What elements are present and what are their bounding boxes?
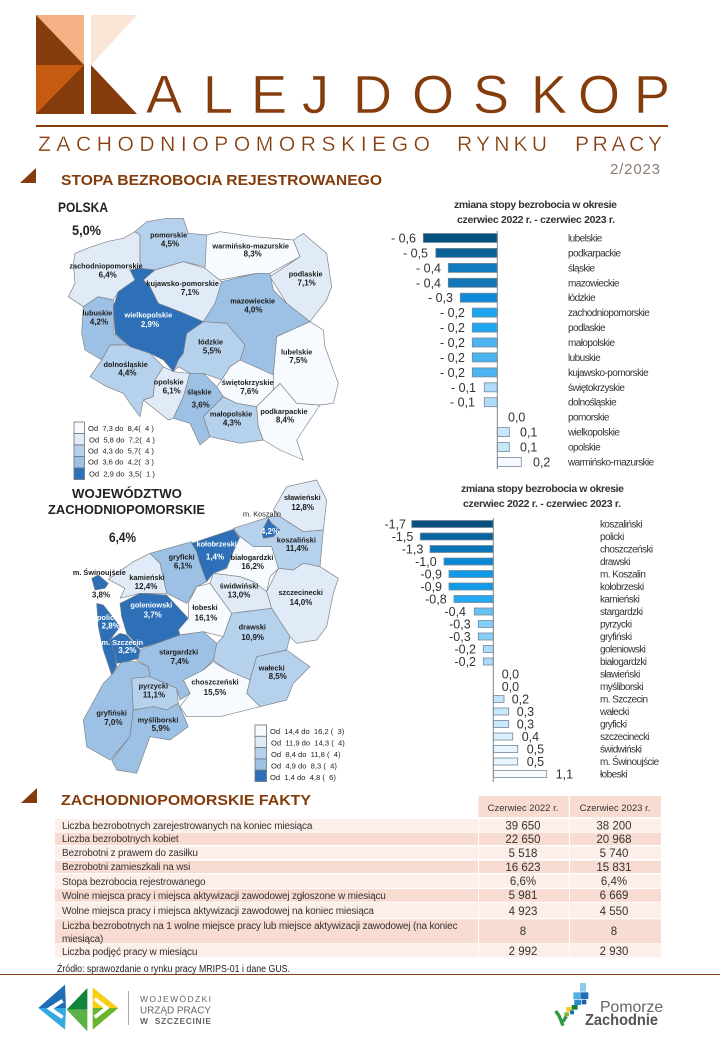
section heading: facts: [21, 788, 311, 809]
labels: łobeski: [600, 770, 627, 780]
labels: m. Koszalin: [600, 570, 645, 580]
labels: m. Szczecin: [600, 694, 648, 706]
axis: [492, 518, 494, 782]
values: -1,5: [392, 530, 413, 544]
table values 2023: 5 740: [600, 848, 628, 860]
legend: Poland: Od 5,8 do 7,2( 4 ): [89, 436, 155, 444]
labels: wielkopolskie: [567, 428, 620, 439]
section heading: facts: ZACHODNIOPOMORSKIE FAKTY: [61, 792, 311, 809]
values: -1,3: [402, 542, 423, 556]
map: Zachodniopomorskie: kamieński: [129, 573, 165, 582]
labels: myśliborski: [600, 682, 643, 693]
table row labels: Bezrobotni z prawem do zasiłku: [62, 848, 198, 859]
map: Poland: 4,2%: [90, 317, 108, 326]
table values 2022: 2 992: [509, 946, 537, 958]
chart title: [461, 483, 624, 510]
labels: łódzkie: [568, 293, 596, 304]
map: Zachodniopomorskie: myśliborski: [138, 715, 178, 724]
values: [391, 232, 550, 469]
labels: pyrzycki: [600, 620, 632, 630]
values: -1,0: [415, 555, 437, 569]
map: Zachodniopomorskie: świdwiński: [220, 581, 258, 590]
table: facts: [55, 796, 661, 958]
values: -0,9: [420, 580, 442, 594]
map: Poland: 7,5%: [289, 356, 307, 365]
values: 0,0: [502, 668, 519, 682]
logo: Pomorze Zachodnie: [556, 983, 663, 1029]
table values 2022: 8: [520, 926, 526, 938]
values: 0,5: [527, 742, 544, 756]
map: Zachodniopomorskie: 15,5%: [204, 688, 226, 697]
chart: change Zachodniopomorskie: [384, 483, 660, 782]
values: 0,0: [502, 680, 519, 694]
map: Zachodniopomorskie: m. Szczecin: [102, 638, 144, 647]
bars: [423, 234, 521, 466]
map: Zachodniopomorskie: sławieński: [284, 493, 321, 502]
table row labels: Stopa bezrobocia rejestrowanego: [62, 877, 206, 888]
axis: [496, 231, 498, 469]
map: Zachodniopomorskie: 8,5%: [269, 672, 287, 681]
labels: [599, 520, 660, 780]
subtitle: RYNKU: [457, 133, 547, 156]
heading: voivodeship: WOJEWÓDZTWO: [72, 486, 182, 501]
legend: Poland: Od 4,3 do 5,7( 4 ): [88, 446, 154, 456]
map: Poland: 8,3%: [244, 250, 262, 259]
table values 2023: 6 669: [600, 890, 628, 902]
map: Zachodniopomorskie: łobeski: [192, 603, 218, 612]
map: Poland: podlaskie: [289, 270, 323, 279]
map: Poland: 7,1%: [298, 279, 316, 288]
map: Zachodniopomorskie: wałecki: [258, 663, 285, 672]
legend: Zachodniopomorskie: Od 11,9 do 14,3 ( 4): [271, 738, 345, 748]
values: 0,3: [517, 705, 534, 719]
map: Zachodniopomorskie: 12,4%: [135, 582, 157, 591]
map: Zachodniopomorskie: 11,1%: [143, 691, 165, 700]
source note: Źródło: sprawozdanie o rynku pracy MRIPS-01 i dane GUS.: [57, 962, 290, 975]
bars: [412, 520, 547, 778]
map: Zachodniopomorskie: 10,9%: [241, 633, 264, 642]
wordmark: W SZCZECINIE: [140, 1016, 211, 1026]
values: 0,0: [508, 411, 525, 425]
map: Poland: lubelskie: [281, 347, 312, 356]
table values 2023: 20 968: [596, 834, 632, 846]
logo: kaleidoscope K: [36, 15, 137, 114]
labels: kołobrzeski: [600, 582, 644, 593]
wordmark: [140, 994, 211, 1026]
separator: [128, 991, 129, 1025]
labels: opolskie: [568, 442, 601, 454]
values: - 0,2: [440, 321, 465, 335]
table values 2022: 4 923: [509, 906, 537, 918]
labels: mazowieckie: [568, 278, 620, 289]
labels: szczecinecki: [600, 732, 650, 743]
labels: policki: [600, 532, 624, 543]
map: Poland: śląskie: [187, 388, 212, 397]
values: - 0,1: [451, 381, 476, 395]
labels: gryficki: [600, 720, 627, 730]
map: Poland: opolskie: [154, 377, 184, 386]
labels: świdwiński: [600, 744, 642, 756]
map: Poland: małopolskie: [210, 410, 252, 419]
table values 2023: 6,4%: [601, 876, 627, 888]
values: - 0,2: [440, 351, 465, 365]
map: Poland: 8,4%: [276, 416, 294, 425]
regional rate: 6,4%: [109, 530, 136, 545]
legend: Poland: Od 3,6 do 4,2( 3 ): [88, 458, 154, 466]
values: 0,3: [517, 718, 534, 732]
legend: Zachodniopomorskie: [255, 725, 345, 782]
table header: [478, 796, 661, 817]
values: 0,5: [527, 755, 544, 769]
table values 2022: 5 981: [509, 890, 537, 902]
chart title: zmiana stopy bezrobocia w okresie: [454, 199, 617, 211]
values: - 0,6: [391, 232, 416, 246]
title rule: [36, 125, 668, 127]
table row labels: Liczba bezrobotnych zarejestrowanych na koniec miesiąca: [62, 821, 313, 832]
table row labels: Bezrobotni zamieszkali na wsi: [62, 862, 190, 873]
values: - 0,4: [416, 261, 441, 275]
map: Zachodniopomorskie: 2,8%: [102, 622, 120, 631]
labels: m. Świnoujście: [600, 755, 660, 768]
map: Poland: zachodniopomorskie: [69, 262, 143, 271]
labels: kujawsko-pomorskie: [568, 368, 649, 379]
icon: pixel squares: [556, 983, 588, 1026]
map: Poland: warmińsko-mazurskie: [211, 241, 289, 250]
map: Zachodniopomorskie: m. Świnoujście: [73, 568, 126, 577]
values: - 0,2: [440, 366, 465, 380]
map: Zachodniopomorskie: 3,8%: [92, 591, 110, 600]
values: -0,3: [449, 618, 471, 632]
values: -0,8: [425, 592, 447, 606]
icon: three diamonds: [38, 985, 118, 1031]
map: Poland: łódzkie: [198, 337, 223, 346]
map: Zachodniopomorskie: 3,7%: [144, 610, 162, 619]
map: Poland: 6,4%: [99, 270, 117, 279]
chart title: zmiana stopy bezrobocia w okresie: [461, 483, 624, 495]
legend: Zachodniopomorskie: Od 14,4 do 16,2 ( 3): [270, 727, 345, 736]
chart: change Poland: [391, 199, 655, 469]
logo: Pomorze Zachodnie: Pomorze: [600, 999, 663, 1016]
map: Poland: 4,0%: [244, 306, 262, 315]
map: Poland: 4,3%: [223, 419, 241, 428]
map: Zachodniopomorskie: 6,1%: [174, 561, 192, 570]
map: Zachodniopomorskie: kołobrzeski: [197, 540, 237, 549]
labels: drawski: [600, 557, 630, 568]
section heading: unemployment rate: STOPA BEZROBOCIA REJESTROWANEGO: [61, 173, 382, 189]
map: Poland: 6,1%: [163, 386, 181, 395]
values: 0,1: [520, 426, 537, 440]
map: Zachodniopomorskie: stargardzki: [159, 647, 198, 656]
labels: podlaskie: [568, 323, 606, 334]
table values 2022: 39 650: [505, 820, 541, 832]
values: - 0,4: [416, 276, 441, 290]
values: - 0,1: [450, 396, 475, 410]
legend: Poland: Od 7,3 do 8,4( 4 ): [88, 424, 154, 433]
table values 2022: [505, 820, 541, 958]
table header: Czerwiec 2022 r.: [488, 803, 558, 814]
national rate: 5,0%: [72, 223, 101, 238]
labels: świętokrzyskie: [568, 383, 625, 394]
map: Zachodniopomorskie: 16,2%: [241, 562, 264, 571]
values: - 0,5: [403, 246, 428, 260]
values: - 0,2: [440, 336, 465, 350]
heading: Polska: POLSKA: [58, 199, 108, 215]
subtitle: PRACY: [575, 133, 662, 156]
map: Zachodniopomorskie: 16,1%: [195, 614, 217, 623]
table values 2023: 4 550: [600, 906, 628, 918]
table values 2022: 22 650: [505, 834, 541, 846]
table values 2022: 5 518: [509, 848, 537, 860]
wordmark: WOJEWÓDZKI: [140, 994, 211, 1004]
subtitle: [38, 133, 662, 156]
table values 2023: 38 200: [596, 820, 632, 832]
values: - 0,3: [428, 291, 453, 305]
values: 0,4: [522, 730, 539, 744]
legend: Zachodniopomorskie: Od 1,4 do 4,8 ( 6): [270, 773, 336, 782]
values: -0,9: [420, 568, 442, 582]
map: Poland: świętokrzyskie: [222, 378, 274, 387]
chart title: czerwiec 2022 r. - czerwiec 2023 r.: [457, 214, 615, 226]
table row labels: Wolne miejsca pracy i miejsca aktywizacji zawodowej zgłoszone w miesiącu: [62, 891, 386, 902]
map: Zachodniopomorskie: goleniowski: [130, 601, 172, 610]
values: [384, 518, 573, 782]
map: Zachodniopomorskie: 4,2%: [261, 527, 279, 536]
map: Poland: 5,5%: [203, 346, 221, 355]
chart title: czerwiec 2022 r. - czerwiec 2023 r.: [463, 498, 621, 510]
map: Zachodniopomorskie: choszczeński: [191, 678, 239, 687]
table header: Czerwiec 2023 r.: [580, 803, 650, 814]
labels: dolnośląskie: [568, 398, 617, 409]
map: Zachodniopomorskie: pyrzycki: [139, 681, 168, 690]
map: Poland: 2,9%: [141, 320, 159, 329]
table values 2023: 2 930: [600, 946, 628, 958]
chart title: [454, 199, 617, 226]
labels: choszczeński: [600, 544, 653, 556]
table row labels: [62, 821, 457, 958]
wordmark: URZĄD PRACY: [140, 1004, 211, 1016]
heading: voivodeship: ZACHODNIOPOMORSKIE: [48, 502, 205, 517]
labels: lubelskie: [568, 234, 603, 244]
map: Zachodniopomorskie: szczecinecki: [278, 588, 323, 597]
map: Poland: 4,4%: [118, 368, 136, 377]
labels: śląskie: [568, 263, 596, 274]
table values 2022: 16 623: [505, 862, 541, 874]
labels: [567, 234, 655, 468]
labels: goleniowski: [600, 644, 646, 656]
map: Poland: kujawsko-pomorskie: [146, 279, 219, 288]
logo: Pomorze Zachodnie: Zachodnie: [585, 1012, 658, 1029]
values: -0,4: [444, 605, 466, 619]
labels: koszaliński: [600, 520, 642, 530]
values: -1,7: [384, 518, 406, 532]
map: Poland: 7,1%: [181, 288, 199, 297]
map: Zachodniopomorskie: 12,8%: [291, 503, 314, 512]
map: Poland: pomorskie: [150, 230, 187, 239]
legend: Zachodniopomorskie: Od 4,9 do 8,3 ( 4): [271, 762, 337, 770]
labels: warmińsko-mazurskie: [567, 457, 655, 468]
map: Zachodniopomorskie: 11,4%: [286, 544, 308, 553]
map: Zachodniopomorskie: gryficki: [169, 552, 195, 561]
map: Zachodniopomorskie: koszaliński: [277, 535, 316, 544]
values: 1,1: [556, 768, 573, 782]
values: 0,2: [512, 692, 529, 706]
map: Zachodniopomorskie: [73, 480, 338, 773]
labels: białogardzki: [600, 657, 647, 668]
labels: pomorskie: [568, 413, 610, 424]
map: Zachodniopomorskie: policki: [97, 613, 120, 622]
map: Zachodniopomorskie: drawski: [239, 623, 266, 632]
values: 0,2: [533, 455, 550, 469]
footer rule: [0, 974, 720, 975]
heading: voivodeship: [48, 486, 205, 517]
title: ALEJDOSKOP: [146, 65, 670, 125]
legend: Poland: Od 2,9 do 3,5( 1 ): [89, 470, 155, 478]
map: Zachodniopomorskie: 3,2%: [118, 646, 136, 655]
map: Zachodniopomorskie: 1,4%: [206, 552, 224, 561]
logo: Wojewódzki Urząd Pracy: [38, 985, 211, 1031]
map: Poland: 3,6%: [192, 401, 210, 410]
map: Zachodniopomorskie: 7,4%: [171, 657, 189, 666]
labels: gryfiński: [600, 632, 632, 643]
values: -0,3: [449, 630, 471, 644]
labels: stargardzki: [600, 607, 643, 618]
subtitle: ZACHODNIOPOMORSKIEGO: [38, 133, 430, 156]
map: Zachodniopomorskie: m. Koszalin: [243, 510, 281, 519]
values: -0,2: [454, 655, 476, 669]
issue number: 2/2023: [610, 161, 660, 178]
map: Poland: 4,5%: [161, 240, 179, 249]
labels: podkarpackie: [568, 248, 622, 259]
map: Zachodniopomorskie: 13,0%: [228, 590, 250, 599]
table values 2023: 8: [611, 926, 617, 938]
map: Poland: mazowieckie: [230, 296, 275, 305]
map: Poland: lubuskie: [82, 309, 112, 318]
labels: kamieński: [600, 594, 640, 606]
table values 2023: 15 831: [596, 862, 632, 874]
table row labels: Wolne miejsca pracy i miejsca aktywizacji zawodowej na koniec miesiąca: [62, 906, 374, 917]
map: Zachodniopomorskie: 7,0%: [104, 718, 122, 727]
legend: Poland: [74, 422, 155, 480]
table values 2023: [596, 820, 632, 958]
values: - 0,2: [440, 306, 465, 320]
values: 0,1: [520, 440, 537, 454]
table row labels: Liczba podjęć pracy w miesiącu: [62, 947, 197, 958]
section heading: unemployment rate: [20, 168, 382, 189]
table row backgrounds: [55, 819, 661, 957]
labels: małopolskie: [568, 338, 615, 349]
map: Zachodniopomorskie: 14,0%: [290, 598, 312, 607]
labels: zachodniopomorskie: [568, 308, 650, 319]
map: Poland: podkarpackie: [260, 407, 308, 416]
map: Zachodniopomorskie: gryfiński: [96, 709, 127, 718]
values: -0,2: [454, 642, 476, 656]
table values 2022: 6,6%: [510, 876, 536, 888]
legend: Zachodniopomorskie: Od 8,4 do 11,8 ( 4): [271, 750, 341, 759]
map: Poland: 7,6%: [240, 387, 258, 396]
map: Poland: dolnośląskie: [103, 360, 148, 369]
map: Poland: [68, 218, 338, 460]
labels: sławieński: [600, 670, 640, 680]
map: Poland: wielkopolskie: [124, 310, 172, 319]
map: Zachodniopomorskie: białogardzki: [231, 553, 273, 562]
map: Zachodniopomorskie: 5,9%: [152, 724, 170, 733]
labels: lubuskie: [568, 353, 601, 364]
table row labels: miesiąca): [62, 934, 103, 945]
table row labels: Liczba bezrobotnych na 1 wolne miejsce pracy lub miejsce aktywizacji zawodowej (na koniec: [62, 921, 457, 932]
table row labels: Liczba bezrobotnych kobiet: [62, 834, 179, 845]
labels: wałecki: [599, 707, 629, 718]
